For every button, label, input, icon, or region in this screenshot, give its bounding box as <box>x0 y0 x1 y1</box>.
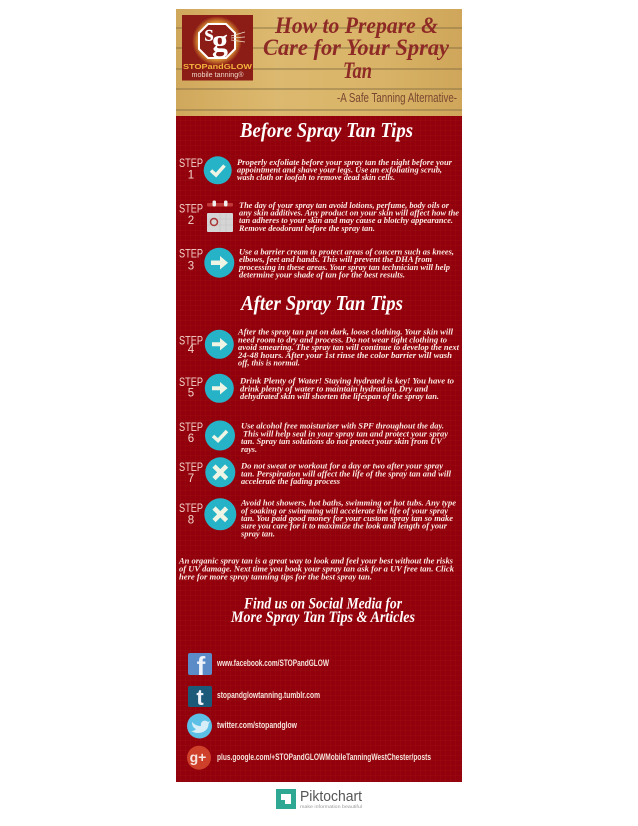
step 1: wash cloth or loofah to remove dead skin cells. <box>237 173 395 182</box>
step 6: STEP <box>179 422 203 434</box>
step 8: tan. You paid good money for your custom spray tan so make <box>241 514 453 523</box>
heading: find us on social media: Find us on Social Media for <box>243 596 403 612</box>
step 2: STEP <box>179 204 203 216</box>
step 5 <box>179 374 454 403</box>
logo: s <box>204 21 214 47</box>
step 7: STEP <box>179 462 203 474</box>
piktochart footer logo: Piktochart <box>300 788 363 805</box>
step 5: dehydrated skin will shorten the lifespan of the spray tan. <box>240 392 439 401</box>
step 8 <box>179 498 456 539</box>
step 4: need room to dry and process. Do not wear tight clothing to <box>238 335 447 344</box>
icon: calendar <box>207 200 233 232</box>
facebook link: www.facebook.com/STOPandGLOW <box>216 658 329 668</box>
step 5: STEP <box>179 377 203 389</box>
step 4 <box>179 328 460 368</box>
step 1: 1 <box>188 170 194 182</box>
piktochart footer logo <box>276 788 363 809</box>
step 5: 5 <box>188 388 194 400</box>
step 4: 4 <box>188 344 195 356</box>
step 7: tan. Perspiration will affect the life of the spray tan and will <box>241 469 452 478</box>
step 8: of soaking or swimming will accelerate the life of your spray <box>241 506 448 515</box>
step 2: The day of your spray tan avoid lotions, perfume, body oils or <box>239 201 450 210</box>
step 4: off, this is normal. <box>238 359 300 368</box>
twitter link <box>187 714 298 738</box>
step 5: Drink Plenty of Water! Staying hydrated is key! You have to <box>239 377 454 386</box>
step 2 <box>179 200 459 233</box>
heading: find us on social media <box>230 596 415 626</box>
tumblr link: stopandglowtanning.tumblr.com <box>217 690 320 700</box>
tumblr link: t <box>196 685 204 710</box>
tagline: -A Safe Tanning Alternative- <box>337 90 457 105</box>
heading: after spray tan tips: After Spray Tan Tips <box>239 291 403 315</box>
closing paragraph: of UV damage. Next time you book your spray tan ask for a UV free tan. Click <box>179 564 455 573</box>
closing paragraph <box>178 557 455 581</box>
logo: g <box>212 22 228 58</box>
step 6: 6 <box>188 433 194 445</box>
step 6 <box>179 420 448 454</box>
step 1: appointment and shave your legs. Use an exfoliating scrub, <box>237 166 442 174</box>
step 4: 24-48 hours. After your 1st rinse the color barrier will wash <box>237 351 452 360</box>
facebook link <box>188 651 329 681</box>
step 8: STEP <box>179 503 203 515</box>
title: How to Prepare & <box>274 13 438 38</box>
step 2: tan adheres to your skin and may cause a blotchy appearance. <box>239 216 453 225</box>
closing paragraph: here for more spray tanning tips for the best spray tan. <box>179 572 372 581</box>
google plus link: plus.google.com/+STOPandGLOWMobileTanningWestChester/posts <box>217 752 431 762</box>
step 5: drink plenty of water to maintain hydration. Dry and <box>240 384 429 393</box>
step 1 <box>179 156 453 184</box>
logo: STOPandGLOW <box>183 62 253 71</box>
step 4: STEP <box>179 336 203 348</box>
title: Tan <box>343 58 372 83</box>
facebook link: f <box>197 651 206 681</box>
google plus link: g+ <box>190 749 206 765</box>
step 3: Use a barrier cream to protect areas of concern such as knees, <box>239 248 454 257</box>
tumblr link <box>188 685 320 710</box>
step 6: tan. Spray tan solutions do not protect your skin from UV <box>241 437 444 446</box>
title <box>263 13 450 83</box>
step 7: Do not sweat or workout for a day or two after your spray <box>240 462 443 471</box>
step 3 <box>179 248 454 280</box>
twitter link: twitter.com/stopandglow <box>217 720 298 730</box>
panel: wood header <box>176 9 462 116</box>
step 1: Properly exfoliate before your spray tan the night before your <box>237 158 453 167</box>
panel: red tips background <box>176 116 462 782</box>
google plus link <box>187 746 431 770</box>
logo: mobile tanning® <box>192 71 244 79</box>
title: Care for Your Spray <box>263 35 450 60</box>
closing paragraph: An organic spray tan is a great way to look and feel your best without the risks <box>178 557 453 566</box>
heading: find us on social media: More Spray Tan Tips & Articles <box>230 609 415 626</box>
step 6: rays. <box>241 445 257 454</box>
step 8: sure you care for it to maximize the look and length of your <box>240 522 448 531</box>
step 2: any skin additives. Any product on your skin will affect how the <box>239 209 459 218</box>
step 2: 2 <box>188 215 194 227</box>
heading: before spray tan tips: Before Spray Tan Tips <box>239 118 413 142</box>
step 8: 8 <box>188 514 194 526</box>
step 3: 3 <box>188 260 194 272</box>
step 7: 7 <box>188 473 194 485</box>
piktochart footer logo: make information beautiful <box>300 804 362 809</box>
step 6: This will help seal in your spray tan and protect your spray <box>243 429 448 438</box>
step 6: Use alcohol free moisturizer with SPF throughout the day. <box>241 421 444 430</box>
step 3: determine your shade of tan for the best results. <box>239 271 405 280</box>
step 7: accelerate the fading process <box>241 477 340 486</box>
step 1: STEP <box>179 158 203 170</box>
step 7 <box>179 457 452 487</box>
step 4: avoid smearing. The spray tan will continue to develop the next <box>238 343 460 352</box>
step 8: Avoid hot showers, hot baths, swimming or hot tubs. Any type <box>240 499 456 508</box>
step 3: STEP <box>179 248 203 260</box>
logo <box>182 15 253 80</box>
step 3: elbows, feet and hands. This will prevent the DHA from <box>239 255 432 264</box>
step 3: processing in these areas. Your spray tan technician will help <box>238 263 450 272</box>
step 4: After the spray tan put on dark, loose clothing. Your skin will <box>237 328 454 337</box>
step 2: Remove deodorant before the spray tan. <box>238 224 375 233</box>
step 8: spray tan. <box>240 530 275 539</box>
